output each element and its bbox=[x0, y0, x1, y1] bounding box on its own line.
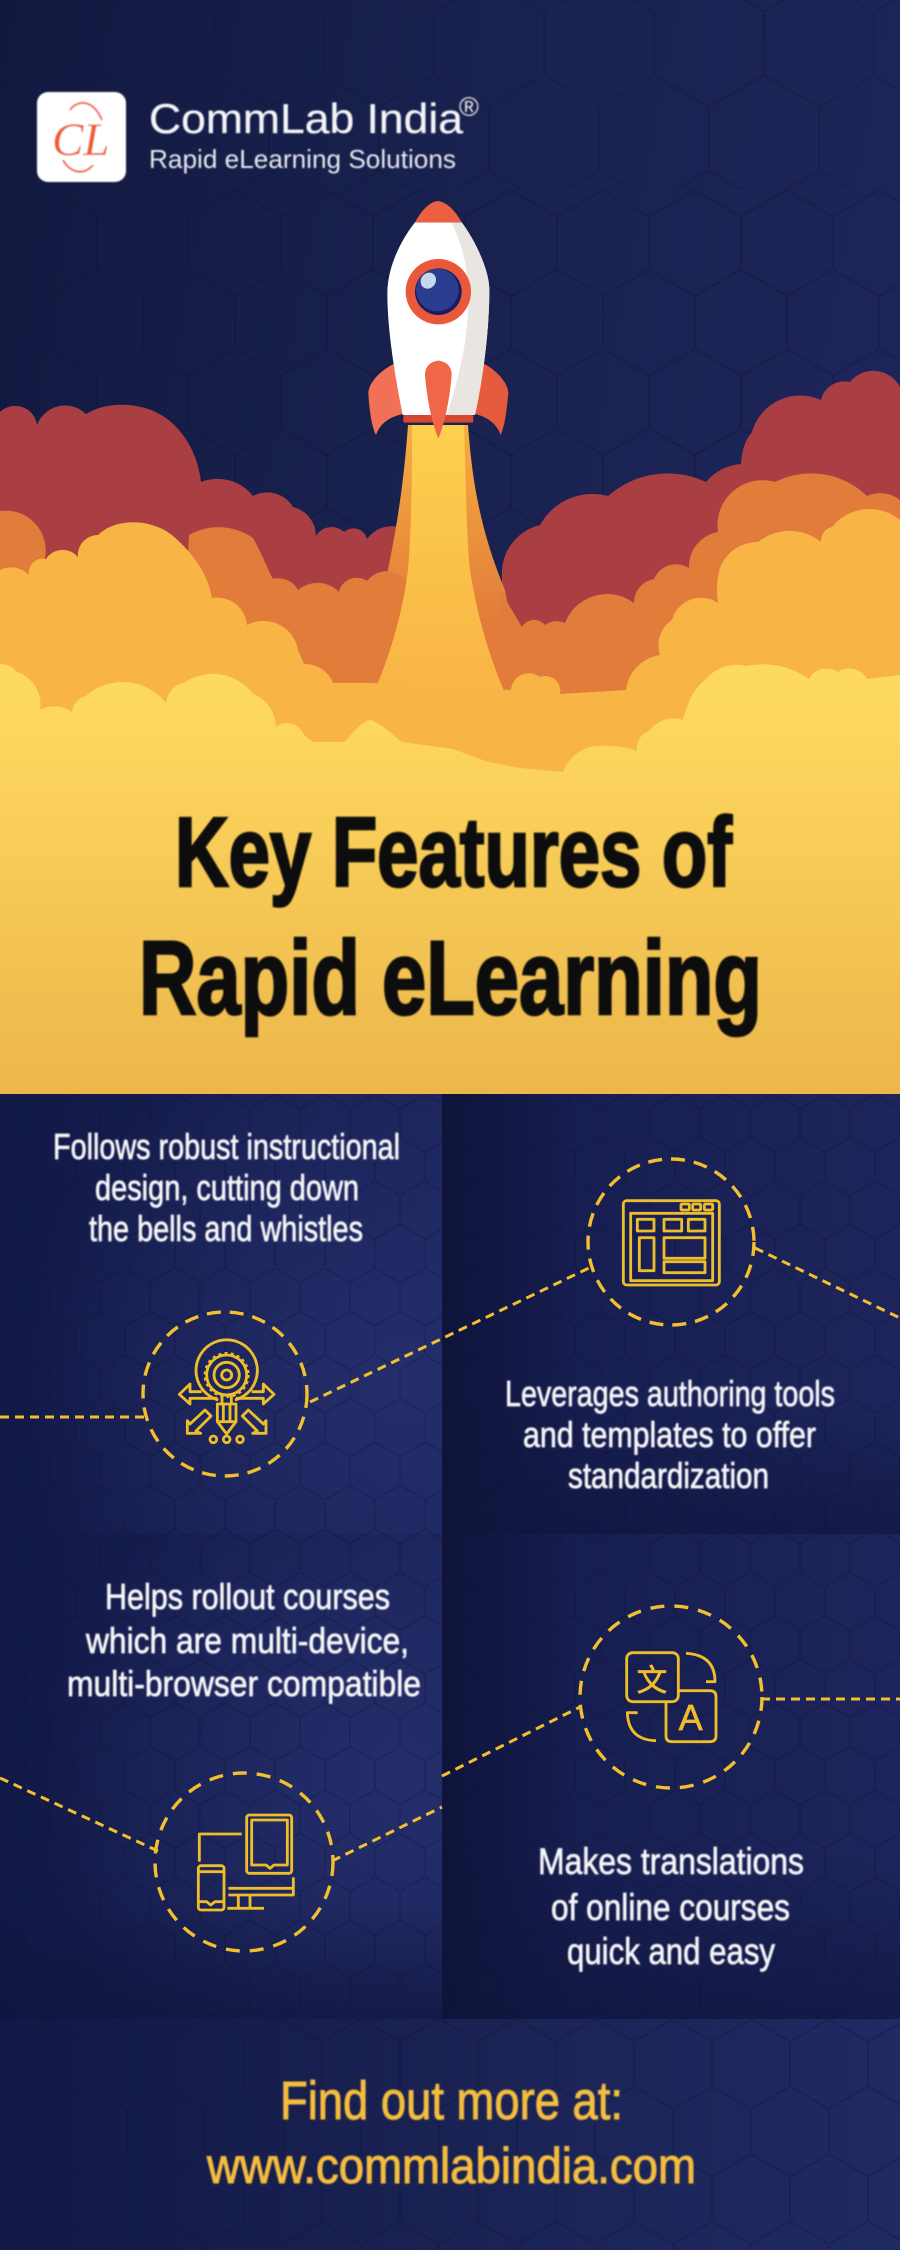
text: feature 3: Helps rollout courses bbox=[105, 1576, 390, 1617]
text: feature 1 bbox=[53, 1126, 400, 1249]
red back clouds bbox=[0, 371, 900, 720]
footer call to action: Find out more at: bbox=[280, 2071, 623, 2131]
logo: CommLab India bbox=[37, 92, 479, 182]
dashed circle: feature 1 bbox=[143, 1312, 307, 1476]
rocket bbox=[368, 201, 508, 438]
icon: devices bbox=[198, 1815, 293, 1910]
rocket flame: inner core bbox=[368, 425, 510, 705]
feature 1: instructional design bbox=[53, 1126, 400, 1476]
translate glyph: Chinese character: 文 bbox=[637, 1655, 667, 1700]
footer call to action bbox=[206, 2071, 696, 2194]
text: feature 3: multi-browser compatible bbox=[67, 1663, 421, 1704]
translate glyph: Latin letter: A bbox=[679, 1697, 703, 1738]
dashed circle: feature 4 bbox=[580, 1606, 762, 1788]
main title: Key Features of bbox=[175, 797, 732, 907]
orange middle clouds bbox=[0, 473, 900, 730]
dashed circle: feature 2 bbox=[588, 1159, 754, 1325]
icon: template window bbox=[623, 1201, 719, 1285]
tagline: Rapid eLearning Solutions bbox=[149, 144, 456, 174]
rocket centre fin bbox=[425, 361, 452, 438]
rocket flame: outer glow bbox=[360, 425, 530, 730]
text: feature 4: of online courses bbox=[551, 1887, 790, 1928]
registered mark: ® bbox=[459, 92, 479, 122]
logo mark: CL badge: CL bbox=[52, 114, 110, 166]
icon: lightbulb pencil with arrows bbox=[179, 1340, 274, 1443]
text: feature 1: the bells and whistles bbox=[89, 1208, 363, 1249]
icon: translate bbox=[627, 1653, 716, 1742]
feature 2: authoring tools bbox=[505, 1159, 835, 1496]
text: feature 4: Makes translations bbox=[538, 1841, 804, 1882]
rocket fin: left bbox=[368, 363, 403, 435]
features background panels bbox=[0, 1094, 900, 2250]
rocket body shade bbox=[447, 222, 489, 415]
text: feature 1: design, cutting down bbox=[95, 1167, 359, 1208]
text: feature 4 bbox=[538, 1841, 804, 1972]
dashed circle: feature 3 bbox=[155, 1773, 333, 1951]
brand name: CommLab India bbox=[149, 95, 464, 142]
text: feature 3: which are multi-device, bbox=[85, 1620, 409, 1661]
footer call to action: www.commlabindia.com bbox=[206, 2138, 696, 2194]
rocket body bbox=[387, 222, 489, 415]
feature 4: translations bbox=[538, 1606, 804, 1972]
text: feature 2: and templates to offer bbox=[523, 1414, 816, 1455]
text: feature 4: quick and easy bbox=[567, 1931, 775, 1972]
rocket porthole bbox=[406, 259, 471, 324]
text: feature 1: Follows robust instructional bbox=[53, 1126, 400, 1167]
rocket fin: right bbox=[475, 363, 508, 435]
rocket base band bbox=[403, 415, 473, 423]
main title bbox=[139, 797, 762, 1037]
translate icon outlines bbox=[627, 1653, 716, 1742]
text: feature 2 bbox=[505, 1373, 835, 1496]
light orange clouds bbox=[0, 509, 900, 800]
text: feature 2: standardization bbox=[568, 1455, 769, 1496]
feature 3: multi-device bbox=[67, 1576, 421, 1951]
rocket nose cone bbox=[415, 201, 462, 222]
text: feature 3 bbox=[67, 1576, 421, 1704]
logo mark: CL badge bbox=[37, 92, 126, 182]
top navy hexagon background bbox=[0, 0, 900, 730]
dashed connector lines bbox=[0, 1248, 900, 1861]
yellow front cloud and title panel bbox=[0, 664, 900, 1094]
